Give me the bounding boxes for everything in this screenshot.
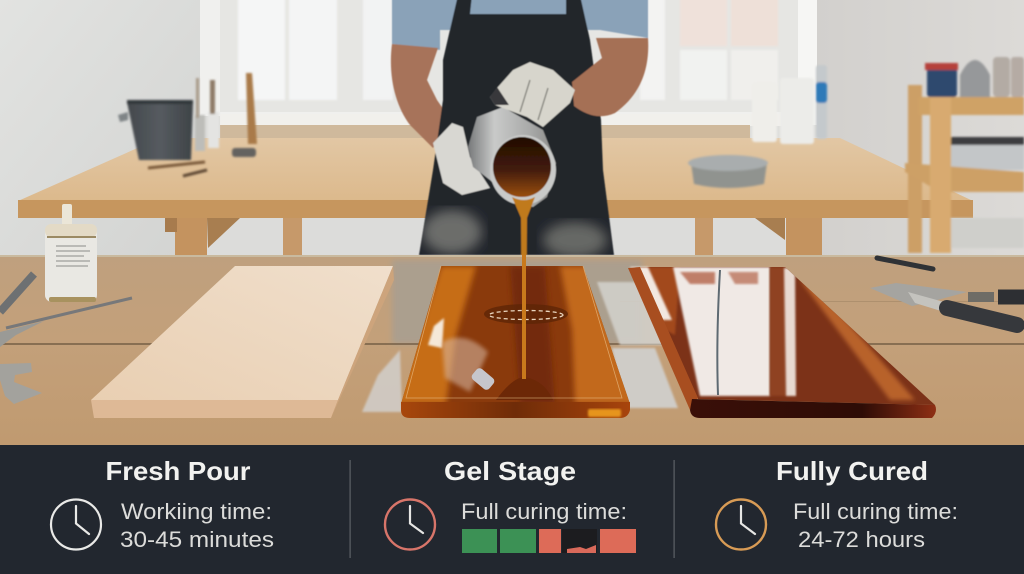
right forearm [572, 38, 648, 116]
tin on back table [688, 155, 768, 188]
curing time text: Full curing time: [793, 499, 958, 524]
shelf with bottles on the right [905, 57, 1024, 253]
resin spill on table [362, 282, 678, 412]
cured resin board [628, 267, 936, 418]
curing time text: 24-72 hours [798, 527, 925, 552]
stage: fresh pour [51, 456, 274, 552]
stage: fully cured [716, 456, 958, 552]
bucket and tools on back table [118, 73, 257, 176]
apron splashes [422, 210, 607, 258]
back table [18, 138, 973, 256]
heading: Gel Stage [444, 456, 576, 486]
working time text: Workiing time: [121, 499, 272, 524]
curing time text: Full curing time: [461, 499, 627, 524]
apron [419, 0, 614, 255]
left glove [433, 123, 490, 195]
worker pouring resin [390, 0, 649, 255]
shirt [392, 0, 648, 50]
front work table [0, 255, 1024, 445]
left forearm [391, 44, 453, 148]
progress bar segments [462, 529, 636, 553]
icon: clock [716, 500, 766, 550]
background wall [0, 0, 1024, 260]
heading: Fresh Pour [106, 456, 250, 486]
icon: clock [51, 500, 101, 550]
metal can [468, 107, 556, 207]
hand tools right [870, 258, 1024, 325]
hardener bottle on front table [45, 204, 97, 302]
working time text: 30-45 minutes [120, 527, 274, 552]
heading: Fully Cured [776, 456, 928, 486]
right glove [490, 62, 575, 127]
items on window sill [752, 65, 827, 144]
fresh resin board [395, 255, 636, 418]
hand tools left [0, 274, 132, 404]
stage: gel stage [385, 456, 636, 553]
info panel [0, 445, 1024, 574]
icon: clock [385, 500, 435, 550]
resin stream [512, 197, 535, 380]
raw wood board [91, 266, 394, 418]
window [200, 0, 817, 138]
